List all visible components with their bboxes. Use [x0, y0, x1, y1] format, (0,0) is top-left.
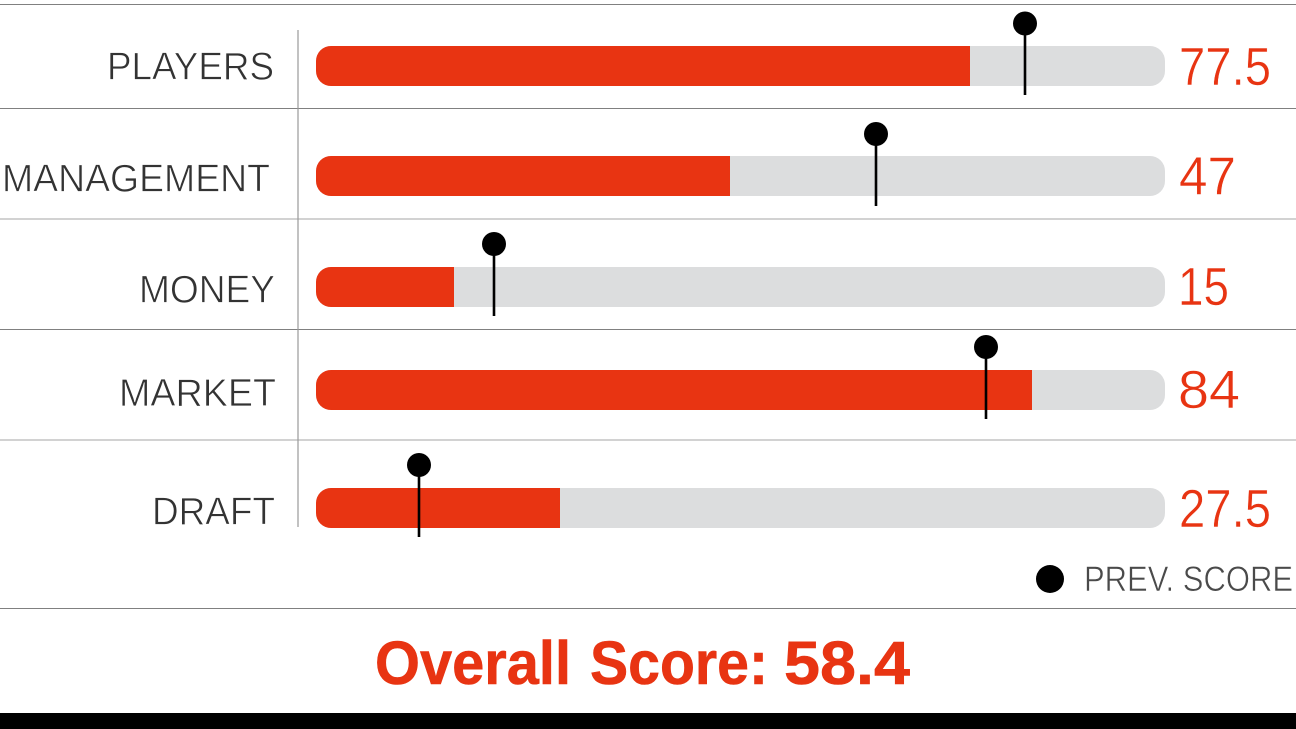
bar: management score	[316, 156, 730, 196]
previous score pin: management	[864, 122, 888, 206]
label: management: MANAGEMENT	[2, 158, 270, 200]
label: money: MONEY	[139, 268, 275, 312]
value: market: 84	[1178, 360, 1240, 420]
bar: market track	[316, 370, 1165, 410]
value: money: 15	[1178, 257, 1229, 317]
footer bar	[0, 713, 1296, 729]
legend: previous score	[1036, 560, 1293, 599]
value: players: 77.5	[1179, 37, 1271, 97]
overall score heading: Score:	[590, 629, 768, 697]
previous score pin: draft	[407, 453, 431, 537]
bar: players track	[316, 46, 1165, 86]
label: market: MARKET	[119, 372, 276, 415]
label: draft: DRAFT	[152, 490, 275, 534]
row: money	[139, 232, 1229, 317]
bar: draft track	[316, 488, 1165, 528]
row: management	[2, 122, 1236, 206]
bar: players score	[316, 46, 970, 86]
bar: money score	[316, 267, 454, 307]
value: draft: 27.5	[1179, 479, 1271, 539]
overall score heading: 58.4	[784, 629, 910, 697]
value: management: 47	[1179, 146, 1236, 206]
bar: management track	[316, 156, 1165, 196]
row: draft	[152, 453, 1271, 539]
label: players: PLAYERS	[107, 46, 274, 88]
icon: legend dot	[1036, 565, 1064, 593]
row: players	[107, 12, 1271, 97]
previous score pin: money	[482, 232, 506, 316]
overall score heading: Overall	[375, 629, 571, 697]
bar: money track	[316, 267, 1165, 307]
bar: market score	[316, 370, 1032, 410]
previous score pin: market	[974, 335, 998, 419]
previous score pin: players	[1013, 12, 1037, 95]
bar: draft score	[316, 488, 560, 528]
row: market	[119, 335, 1240, 420]
